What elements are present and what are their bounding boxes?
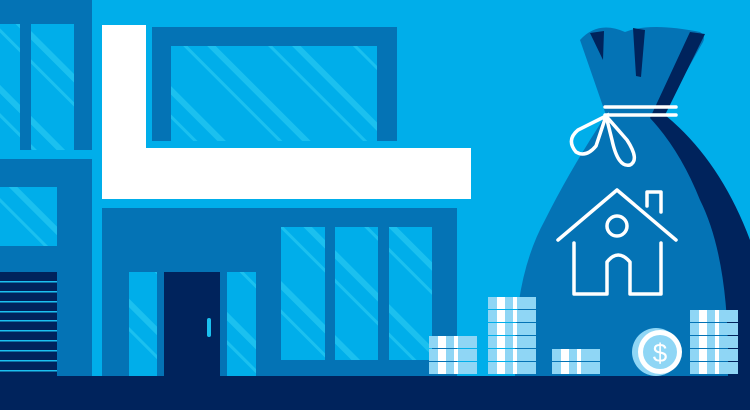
coin stacks [429, 297, 738, 374]
icon: dollar coin [632, 328, 682, 376]
icon: dollar coin: $ [653, 338, 668, 368]
ground floor [102, 208, 457, 376]
icon: house [558, 190, 676, 294]
upper floor window [152, 27, 397, 141]
white L balcony [102, 25, 471, 199]
ground [0, 376, 750, 410]
money bag [515, 27, 750, 376]
left building [0, 0, 92, 376]
bag tie [571, 107, 676, 165]
